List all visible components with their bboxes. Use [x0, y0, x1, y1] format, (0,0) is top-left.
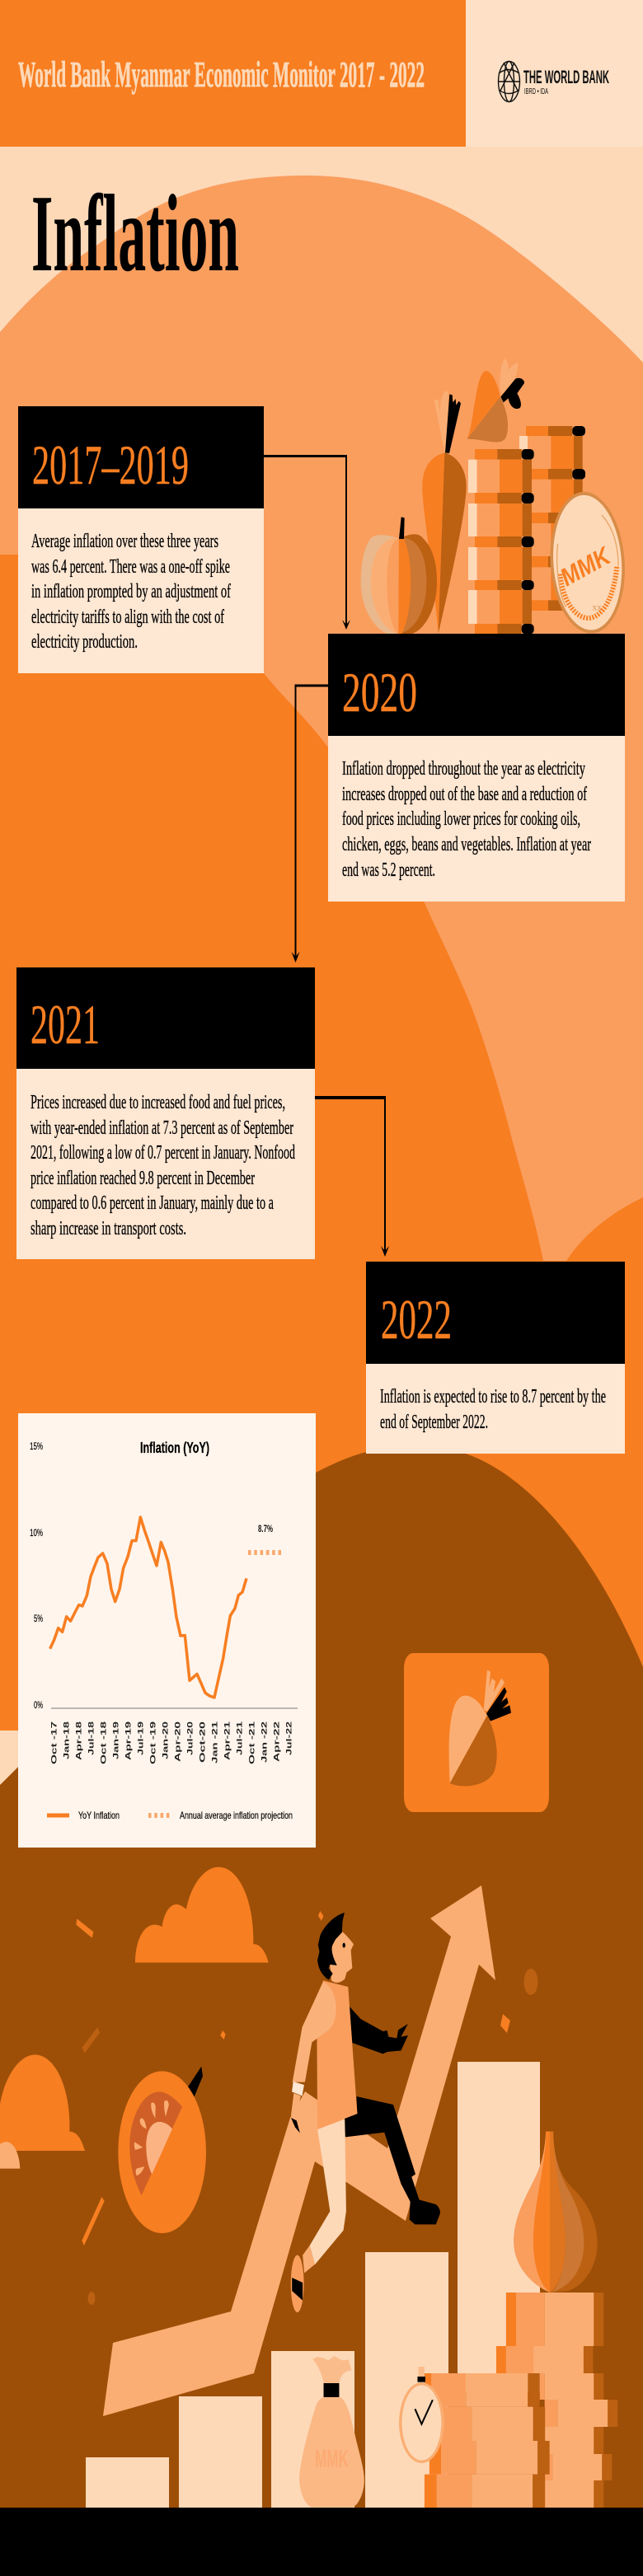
cloud: left — [0, 2054, 85, 2151]
connector arrow 2017-2019 to 2020 — [264, 455, 350, 630]
x axis labels: Apr-21 — [223, 1721, 231, 1760]
rear leg — [345, 2096, 440, 2224]
legend: Annual average inflation projection — [180, 1810, 293, 1821]
y axis labels: 15% — [30, 1440, 43, 1452]
cloud: upper — [135, 1867, 269, 1963]
text block 2021: 2021, following a low of 0.7 percent in January. Nonfood — [31, 1142, 295, 1164]
background hill: salmon — [0, 176, 643, 1318]
x axis labels: Oct -19 — [148, 1721, 157, 1764]
figure: climbing man — [291, 1913, 440, 2265]
x axis labels: Oct -18 — [99, 1721, 107, 1764]
icon: tomato — [118, 2067, 206, 2233]
cloud: small light — [0, 2142, 20, 2169]
x axis labels: Apr-22 — [272, 1721, 280, 1762]
x axis labels: Jan-18 — [63, 1721, 71, 1759]
coin stack front — [468, 449, 534, 634]
legend — [47, 1810, 293, 1821]
projection value: 8.7% — [258, 1523, 273, 1534]
main title: Inflation — [31, 172, 239, 294]
text block 2017-2019: electricity tariffs to align with the cost of — [31, 607, 224, 628]
y axis labels — [30, 1440, 43, 1711]
text block 2022: end of September 2022. — [380, 1412, 488, 1433]
text block 2017-2019: electricity production. — [31, 631, 138, 653]
x axis labels: Jul-19 — [137, 1721, 145, 1755]
x axis labels: Apr-19 — [124, 1721, 132, 1760]
clouds and confetti — [0, 1867, 323, 2246]
right stack — [496, 2293, 617, 2508]
text block 2022 — [380, 1386, 606, 1433]
x axis labels: Oct -21 — [247, 1721, 256, 1764]
text block 2021: with year-ended inflation at 7.3 percent as of September — [31, 1117, 293, 1139]
YoY inflation line — [50, 1517, 246, 1698]
foot — [291, 2246, 315, 2312]
x axis labels: Jul-21 — [236, 1721, 244, 1755]
heading 2021: 2021 — [31, 993, 100, 1056]
panel: 2017-2019 — [18, 406, 264, 673]
chart title: Inflation (YoY) — [140, 1440, 209, 1456]
y axis labels: 5% — [34, 1613, 43, 1624]
icon: carrot tile — [404, 1653, 549, 1812]
text block 2017-2019 — [31, 531, 231, 653]
World Bank logo — [498, 61, 609, 102]
text block 2021 — [31, 1092, 295, 1239]
confetti — [76, 1911, 323, 2246]
projection dotted line — [248, 1550, 283, 1555]
text block 2017-2019: in inflation prompted by an adjustment of — [31, 581, 231, 602]
x axis labels: Jul-22 — [285, 1721, 293, 1755]
torso — [317, 1980, 357, 2129]
growth arrow — [103, 1885, 495, 2416]
connector arrow 2021 to 2022 — [315, 1096, 389, 1257]
confetti right of arrow — [87, 1969, 537, 2305]
text block 2021: sharp increase in transport costs. — [31, 1218, 186, 1239]
text block 2021: price inflation reached 9.8 percent in December — [31, 1168, 255, 1189]
hand — [291, 2093, 306, 2134]
carrot small — [467, 358, 524, 443]
bar chart columns — [86, 2062, 540, 2508]
background hill: orange — [0, 555, 643, 1731]
wristband — [292, 2082, 304, 2096]
connector arrow 2020 to 2021 — [292, 684, 328, 962]
panel: 2020 — [328, 634, 625, 902]
x axis labels — [49, 1721, 293, 1764]
text block 2021: compared to 0.6 percent in January, mainly due to a — [31, 1192, 274, 1214]
illustration: vegetables and coins — [361, 358, 630, 636]
legend: YoY Inflation — [78, 1810, 120, 1821]
sack label: MMK — [315, 2444, 349, 2473]
front leg — [310, 2119, 346, 2265]
pumpkin — [361, 517, 437, 635]
face — [330, 1930, 354, 1983]
left stack — [425, 2373, 550, 2508]
panel: inflation line chart — [18, 1413, 316, 1848]
x axis labels: Oct -17 — [49, 1721, 58, 1764]
World Bank logo: IBRD • IDA — [524, 87, 548, 96]
text block 2017-2019: Average inflation over these three years — [31, 531, 218, 552]
y axis labels: 0% — [34, 1699, 43, 1711]
x axis labels: Apr-20 — [173, 1721, 181, 1762]
heading 2020: 2020 — [342, 661, 417, 724]
header band — [0, 0, 643, 147]
hair — [317, 1913, 345, 1980]
x axis labels: Jan -21 — [211, 1721, 219, 1763]
far arm — [350, 2007, 408, 2054]
carrot large — [422, 391, 467, 634]
text block 2017-2019: was 6.4 percent. There was a one-off spike — [31, 556, 230, 578]
coin stacks lower right — [425, 2293, 617, 2508]
x axis labels: Apr-18 — [74, 1721, 82, 1760]
x axis labels: Oct-20 — [198, 1721, 206, 1763]
x axis line — [51, 1707, 298, 1709]
background hill: brown — [0, 1446, 643, 2576]
x axis labels: Jan-19 — [112, 1721, 120, 1759]
panel: 2021 — [16, 967, 315, 1259]
MMK medallion — [546, 489, 630, 636]
icon: money sack — [299, 2356, 364, 2508]
x axis labels: Jan -22 — [260, 1721, 269, 1763]
icon: stopwatch — [399, 2367, 444, 2463]
x axis labels: Jan-20 — [162, 1721, 170, 1759]
x axis labels: Jul-20 — [186, 1721, 195, 1755]
panel: 2022 — [366, 1262, 625, 1454]
near arm — [293, 1982, 336, 2082]
y axis labels: 10% — [30, 1527, 43, 1539]
coin stack back — [519, 426, 585, 611]
eye — [343, 1943, 345, 1948]
MMK medallion: XX — [592, 605, 602, 612]
x axis labels: Jul-18 — [87, 1721, 96, 1755]
MMK medallion: MMK — [556, 541, 616, 592]
heading 2022: 2022 — [381, 1288, 452, 1351]
text block 2020: end was 5.2 percent. — [342, 859, 435, 881]
text block 2020 — [342, 758, 591, 881]
heading 2017-2019: 2017–2019 — [32, 433, 189, 496]
text block 2021: Prices increased due to increased food and fuel prices, — [31, 1092, 285, 1113]
footer band — [0, 2508, 643, 2576]
icon: onion — [514, 2132, 598, 2293]
